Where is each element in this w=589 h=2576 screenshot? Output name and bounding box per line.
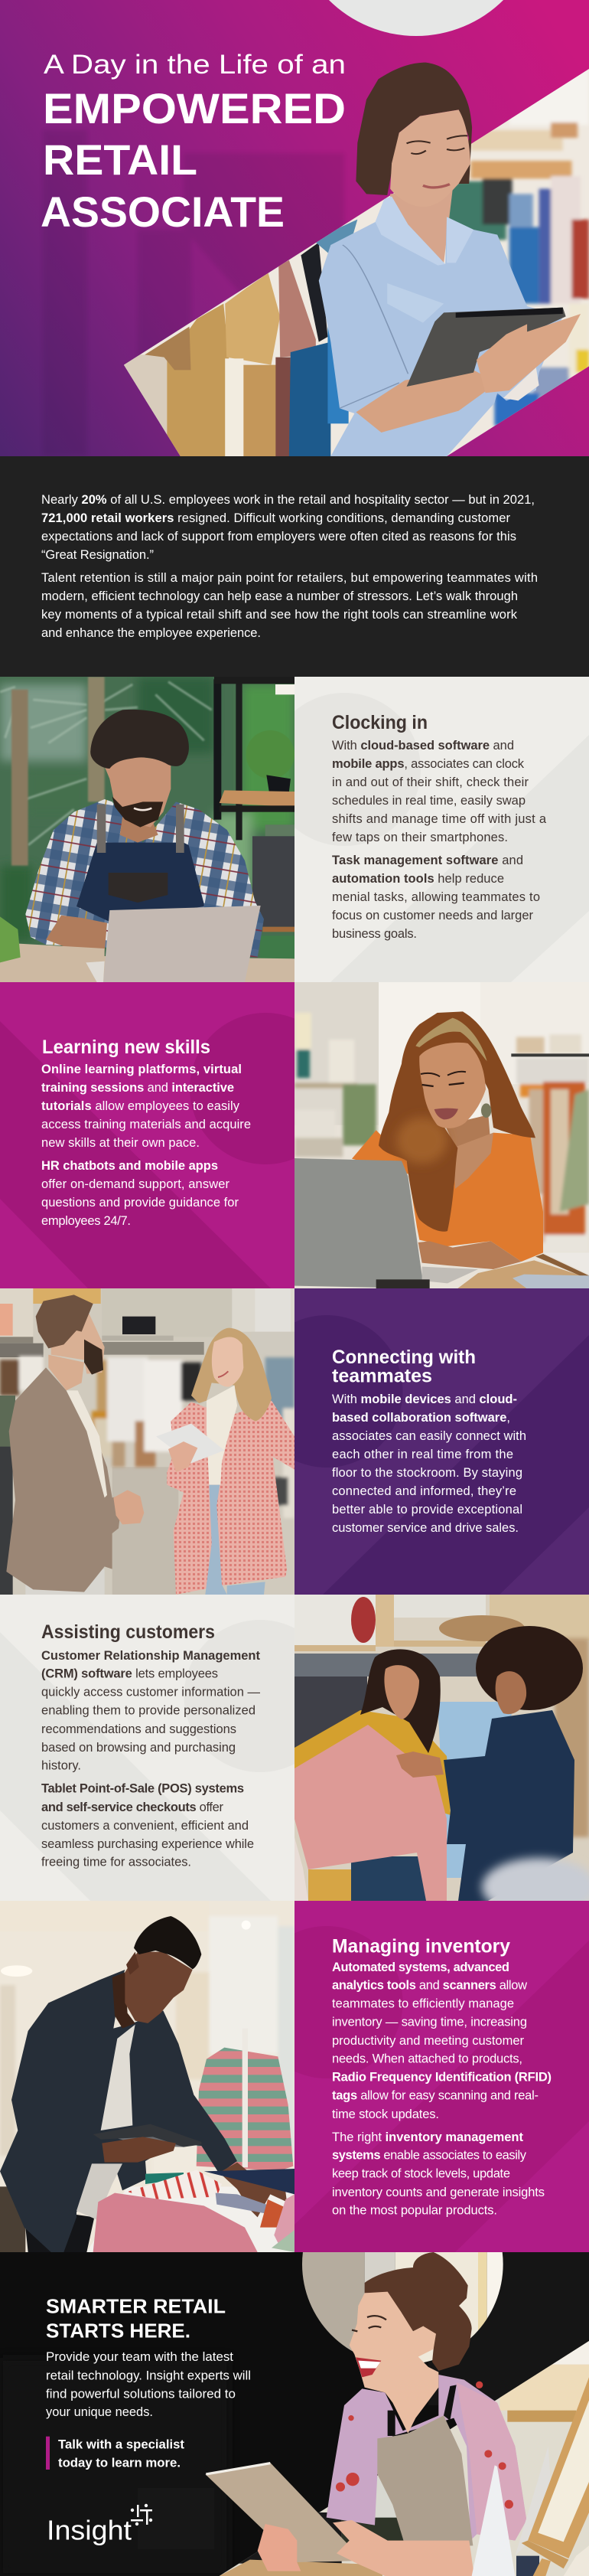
man in plaid shirt and apron <box>25 710 264 958</box>
logo: Insight: Insight <box>47 2515 132 2546</box>
callout: talk with a specialist: Talk with a specialist <box>58 2437 185 2451</box>
body text: learning new skills: employees 24/7. <box>41 1214 131 1228</box>
body text: clocking in: shifts and manage time off with just a <box>332 812 547 826</box>
body text: connecting with teammates: customer service and drive sales. <box>332 1521 519 1535</box>
intro text <box>41 493 538 640</box>
body text: connecting with teammates <box>332 1392 526 1535</box>
body text: learning new skills: access training materials and acquire <box>41 1118 251 1131</box>
panel: hero <box>0 0 589 456</box>
body text: clocking in: automation tools help reduce <box>332 872 504 886</box>
panel: intro <box>41 493 538 640</box>
body text: assisting customers: recommendations and suggestions <box>41 1722 236 1736</box>
body text: assisting customers: seamless purchasing experience while <box>41 1837 254 1851</box>
body text: assisting customers: (CRM) software lets employees <box>41 1667 218 1681</box>
body text: managing inventory: inventory counts and generate insights <box>332 2186 545 2199</box>
body text: connecting with teammates: floor to the stockroom. By staying <box>332 1466 522 1480</box>
title: ASSOCIATE <box>41 188 285 236</box>
body text: clocking in: focus on customer needs and larger <box>332 909 534 922</box>
body text: assisting customers <box>41 1649 260 1869</box>
body text: assisting customers: and self-service checkouts offer <box>41 1801 223 1814</box>
intro text: 721,000 retail workers resigned. Difficult working conditions, demanding customer <box>41 511 511 525</box>
panel: clocking in <box>294 677 589 982</box>
body text: connecting with teammates: better able to provide exceptional <box>332 1503 522 1517</box>
heading: smarter retail <box>46 2295 226 2343</box>
body text: managing inventory: tags allow for easy scanning and real- <box>332 2089 539 2103</box>
hero photo <box>124 63 589 456</box>
photo: associate managing stock <box>0 1901 294 2252</box>
body text: learning new skills: offer on-demand support, answer <box>41 1177 229 1191</box>
panel: learning new skills <box>0 982 294 1288</box>
intro text: Nearly 20% of all U.S. employees work in the retail and hospitality sector — but in 2021, <box>41 493 535 507</box>
body text: assisting customers: freeing time for associates. <box>41 1856 191 1869</box>
man with tablet <box>0 1916 287 2252</box>
body text: clocking in: in and out of their shift, check their <box>332 775 529 789</box>
body text: connecting with teammates: associates can easily connect with <box>332 1429 526 1443</box>
body text: assisting customers: Customer Relationship Management <box>41 1649 260 1663</box>
panel: connecting with teammates <box>294 1288 589 1595</box>
panel: call to action footer <box>0 2252 589 2576</box>
body text: connecting with teammates: each other in real time from the <box>332 1448 513 1461</box>
body text: connecting with teammates: based collaboration software, <box>332 1411 510 1425</box>
body text: clocking in: Task management software and <box>332 854 523 867</box>
store background diamond <box>122 61 589 456</box>
body text: clocking in: schedules in real time, easily swap <box>332 794 526 808</box>
body text: managing inventory: inventory — saving time, increasing <box>332 2016 527 2029</box>
body text: assisting customers: customers a convenient, efficient and <box>41 1819 249 1833</box>
callout: talk with a specialist <box>46 2437 185 2470</box>
title <box>41 50 346 236</box>
heading: managing inventory: Managing inventory <box>332 1936 510 1957</box>
photo: two teammates talking <box>0 1288 294 1595</box>
body text: managing inventory: The right inventory management <box>332 2130 523 2144</box>
heading: smarter retail: SMARTER RETAIL <box>46 2295 226 2318</box>
intro text: and enhance the employee experience. <box>41 626 261 640</box>
body text: managing inventory: productivity and meeting customer <box>332 2034 525 2048</box>
heading: connecting with teammates: teammates <box>332 1366 432 1387</box>
body text: assisting customers: Tablet Point-of-Sale (POS) systems <box>41 1782 244 1796</box>
woman with curly hair <box>352 1011 543 1269</box>
logo: Insight <box>47 2504 152 2546</box>
body text: assisting customers: enabling them to provide personalized <box>41 1704 255 1718</box>
body text: managing inventory: Radio Frequency Identification (RFID) <box>332 2070 552 2084</box>
body text: learning new skills: new skills at their own pace. <box>41 1136 200 1150</box>
body text: managing inventory: Automated systems, advanced <box>332 1961 509 1974</box>
body text: managing inventory: needs. When attached to products, <box>332 2052 522 2065</box>
heading: learning new skills: Learning new skills <box>42 1037 210 1058</box>
body text: call to action: your unique needs. <box>46 2405 153 2419</box>
woman laughing <box>205 2252 526 2576</box>
heading: smarter retail: STARTS HERE. <box>46 2320 190 2343</box>
body text: clocking in: mobile apps, associates can clock <box>332 757 525 771</box>
body text: managing inventory <box>332 1961 552 2217</box>
callout: talk with a specialist: today to learn more. <box>58 2456 181 2470</box>
body text: connecting with teammates: connected and informed, they’re <box>332 1484 516 1498</box>
body text: assisting customers: quickly access customer information — <box>41 1686 260 1699</box>
photo: man at laptop <box>0 677 294 982</box>
body text: managing inventory: teammates to efficiently manage <box>332 1996 514 2010</box>
body text: learning new skills: Online learning platforms, virtual <box>41 1063 242 1076</box>
body text: clocking in: business goals. <box>332 927 417 941</box>
body text: connecting with teammates: With mobile devices and cloud- <box>332 1392 517 1406</box>
title: EMPOWERED <box>43 84 346 132</box>
folded clothes on table <box>93 2169 294 2252</box>
heading: connecting with teammates <box>332 1347 476 1387</box>
body text: learning new skills: training sessions and interactive <box>41 1081 234 1095</box>
title: RETAIL <box>43 135 197 184</box>
body text: learning new skills: tutorials allow employees to easily <box>41 1099 240 1113</box>
photo: woman with laptop <box>294 982 589 1288</box>
bag and easel <box>472 2377 589 2576</box>
panel: managing inventory <box>294 1901 589 2252</box>
photo: associate helping customer <box>294 1595 589 1901</box>
body text: managing inventory: systems enable associates to easily <box>332 2148 527 2162</box>
body text: managing inventory: keep track of stock levels, update <box>332 2167 510 2181</box>
body text: clocking in: few taps on their smartphones. <box>332 831 508 844</box>
heading: assisting customers: Assisting customers <box>41 1621 215 1643</box>
body text: managing inventory: analytics tools and scanners allow <box>332 1978 527 1992</box>
body text: assisting customers: history. <box>41 1759 81 1773</box>
intro text: “Great Resignation.” <box>41 548 154 562</box>
body text: call to action: Provide your team with the latest <box>46 2350 233 2364</box>
decorative circle <box>292 0 540 36</box>
intro text: Talent retention is still a major pain point for retailers, but empowering teammates with <box>41 571 538 585</box>
intro text: key moments of a typical retail shift and see how the right tools can streamline work <box>41 608 518 622</box>
intro text: expectations and lack of support from employers were often cited as reasons for this <box>41 530 516 544</box>
heading: clocking in: Clocking in <box>332 712 428 733</box>
title: A Day in the Life of an <box>44 50 346 80</box>
heading: connecting with teammates: Connecting with <box>332 1347 476 1368</box>
man in blazer <box>6 1295 144 1595</box>
body text: managing inventory: on the most popular products. <box>332 2203 497 2217</box>
body text: call to action: find powerful solutions tailored to <box>46 2387 236 2401</box>
body text: clocking in <box>332 739 547 941</box>
body text: learning new skills <box>41 1063 251 1228</box>
panel: assisting customers <box>0 1595 294 1901</box>
woman with tablet <box>319 63 581 456</box>
body text: call to action <box>46 2350 251 2419</box>
intro text: modern, efficient technology can help ease a number of stressors. Let’s walk through <box>41 589 518 603</box>
body text: assisting customers: based on browsing and purchasing <box>41 1741 236 1755</box>
body text: call to action: retail technology. Insight experts will <box>46 2369 251 2382</box>
body text: managing inventory: time stock updates. <box>332 2107 439 2121</box>
body text: clocking in: menial tasks, allowing teammates to <box>332 890 540 904</box>
woman with tablet <box>156 1328 294 1595</box>
body text: clocking in: With cloud-based software and <box>332 739 514 753</box>
photo: woman laughing with tablet <box>205 2252 589 2576</box>
body text: learning new skills: HR chatbots and mobile apps <box>41 1159 218 1173</box>
body text: learning new skills: questions and provide guidance for <box>41 1196 239 1210</box>
